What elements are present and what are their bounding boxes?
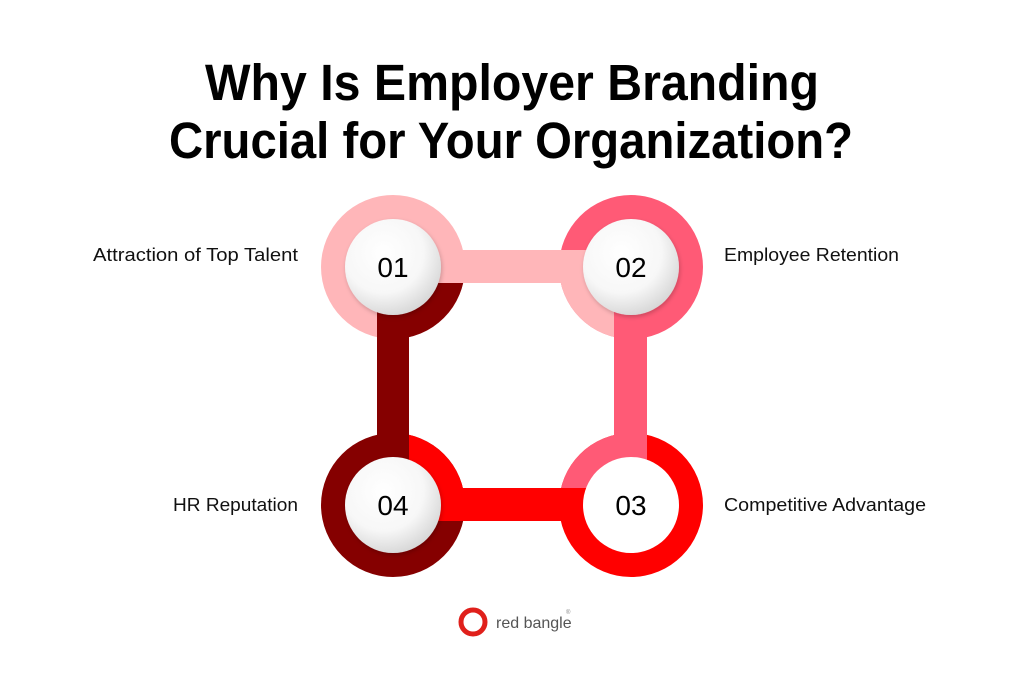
ring 04 — [321, 433, 465, 577]
title: Why Is Employer Branding — [205, 54, 819, 111]
logo: red bangle — [496, 615, 572, 632]
title: Crucial for Your Organization? — [169, 112, 853, 169]
logo: ® — [566, 609, 571, 616]
ring 03 — [559, 433, 703, 577]
badge 01 — [345, 219, 441, 315]
label: Employee Retention: Employee Retention — [724, 245, 899, 265]
badge 03: 03 — [615, 490, 647, 521]
badge 04: 04 — [377, 490, 409, 521]
badge 02 — [583, 219, 679, 315]
ring 01 — [321, 195, 465, 339]
badge 02: 02 — [615, 252, 647, 283]
label: Competitive Advantage: Competitive Advantage — [724, 495, 926, 515]
badge 01: 01 — [377, 252, 409, 283]
title — [169, 54, 853, 169]
connector bars — [377, 250, 647, 521]
badge 03 — [583, 457, 679, 553]
label: Attraction of Top Talent: Attraction of Top Talent — [93, 245, 298, 265]
logo — [461, 609, 572, 634]
badge 04 — [345, 457, 441, 553]
diagram: four-step loop — [321, 195, 703, 577]
label: HR Reputation: HR Reputation — [173, 495, 298, 515]
ring 02 — [559, 195, 703, 339]
